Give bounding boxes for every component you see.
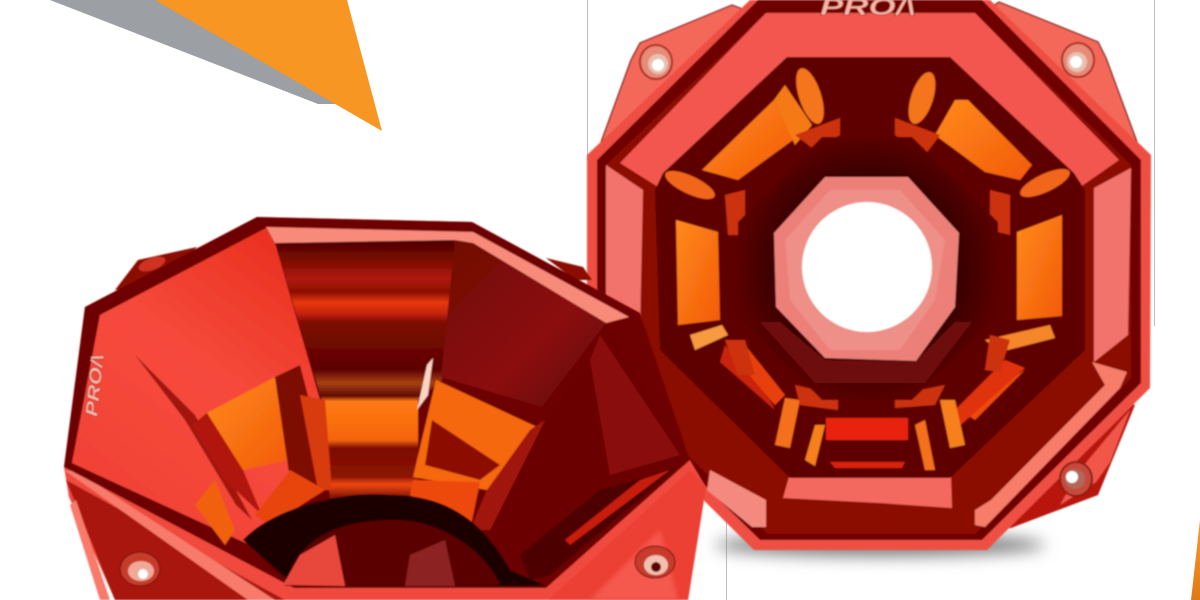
small highlights upper right <box>1017 163 1073 203</box>
bolt hole lower right <box>635 546 675 578</box>
orange stripes lower left <box>690 325 728 350</box>
lower right flange <box>548 470 706 600</box>
left dark strip <box>135 355 252 520</box>
lower right highlight stripe <box>975 362 1127 527</box>
guide lines <box>588 0 1154 600</box>
throat interior <box>285 520 500 586</box>
inner panel ring base <box>655 57 1085 478</box>
lighter inner ring segment <box>785 190 945 350</box>
outer octagon body <box>587 0 1151 550</box>
gold ribbed joints <box>725 118 1010 410</box>
bottom fins left <box>775 398 800 448</box>
orange triangle accent <box>155 0 382 131</box>
orange panel right <box>1017 215 1062 320</box>
back flange upper right <box>546 258 592 280</box>
silhouette base <box>64 217 706 600</box>
grey triangle accent <box>50 0 336 104</box>
embossed logo: PRO/\ <box>82 353 107 417</box>
facet right lower dark <box>490 323 684 583</box>
orange fin top left <box>791 65 829 127</box>
right horn: front view <box>587 0 1151 556</box>
right lower facet reflections <box>520 468 676 580</box>
facet big left <box>72 228 320 545</box>
bolt hole bottom right <box>1060 462 1092 496</box>
dark rim <box>597 0 1141 540</box>
orange panel upper right <box>935 100 1032 180</box>
bottom centre red panel <box>826 418 908 440</box>
light top rim <box>266 227 629 323</box>
bolt hole top right <box>1062 43 1094 77</box>
lower left flange highlights <box>64 470 275 600</box>
dark throat octagon <box>738 137 998 400</box>
orange panel upper left <box>702 100 793 180</box>
pink inner ring <box>774 177 959 361</box>
throat pink reflection <box>283 535 345 586</box>
back flange upper left <box>115 247 197 290</box>
inner body dark red <box>606 13 1131 534</box>
centre column <box>275 240 455 500</box>
bottom fins right <box>915 420 935 470</box>
bolt hole lower left <box>120 552 160 586</box>
pink left strip <box>606 165 643 400</box>
lower left pink highlight <box>707 470 766 527</box>
throat <box>243 494 546 586</box>
right orange facet <box>413 380 537 490</box>
orange panel left <box>676 220 720 325</box>
left orange facet <box>207 377 290 470</box>
bolt hole top left <box>640 45 672 79</box>
column highlight <box>417 358 433 410</box>
small highlights upper left <box>662 165 718 205</box>
pink top band <box>620 13 1119 190</box>
orange sliver accent at right edge <box>1191 520 1200 600</box>
facet upper right dark <box>441 240 606 407</box>
lower left flange <box>66 480 285 600</box>
pink right strip <box>1094 168 1131 362</box>
corner flanges <box>600 2 1137 530</box>
orange stripes lower right <box>985 325 1055 352</box>
rim octagon <box>64 217 690 588</box>
left lower orange glints <box>195 480 235 545</box>
lower throat red ring <box>760 322 972 383</box>
centre hole <box>802 202 932 332</box>
bolt hole back <box>137 254 167 274</box>
left horn: angled view <box>64 217 706 600</box>
drop shadow under right horn <box>715 534 1045 556</box>
orange fin top right <box>903 69 941 127</box>
bottom pink highlight <box>783 477 952 508</box>
